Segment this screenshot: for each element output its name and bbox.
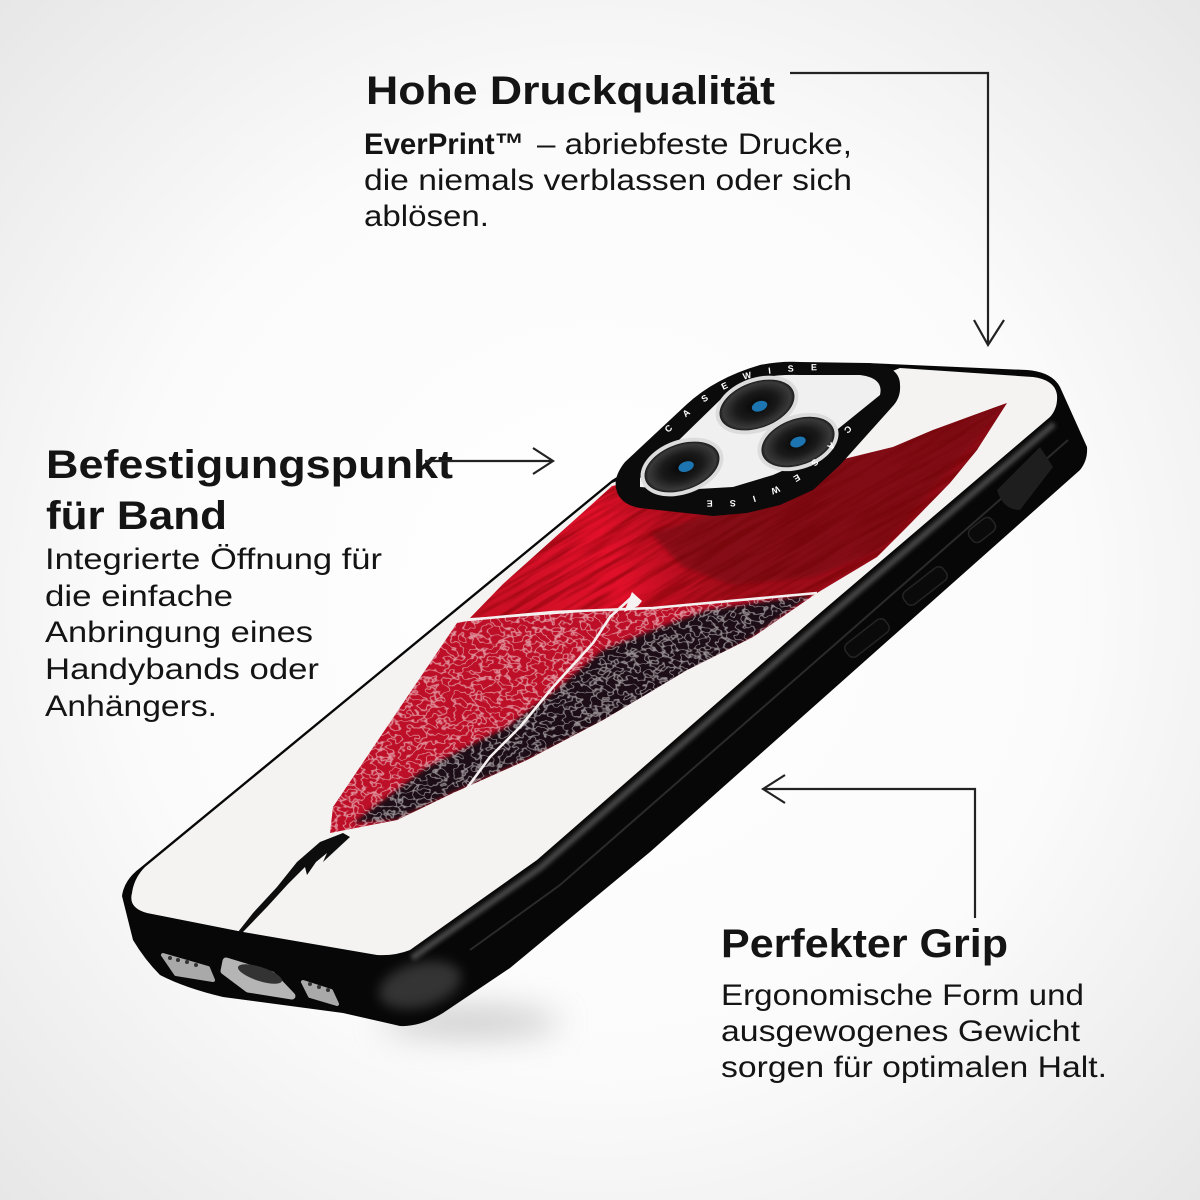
- text block: grip: sorgen für optimalen Halt.: [721, 1051, 1107, 1084]
- text block: strap attachment: Handybands oder: [45, 653, 319, 686]
- usb port: [224, 961, 292, 996]
- usb opening: [236, 960, 284, 988]
- side buttons: [842, 515, 998, 660]
- text block: print quality: EverPrint™: [364, 128, 524, 161]
- arrow: print quality: [790, 73, 1004, 345]
- case body: [122, 363, 1087, 1026]
- heading: strap attachment: [46, 443, 453, 538]
- heading: strap attachment: Befestigungspunkt: [46, 443, 453, 487]
- text block: strap attachment: die einfache: [45, 580, 233, 613]
- text block: print quality: die niemals verblassen oder sich: [364, 164, 852, 197]
- text block: strap attachment: Anhängers.: [45, 690, 217, 723]
- dark brush stroke: [650, 403, 1007, 585]
- camera glass: [640, 375, 881, 490]
- dark feather region: [353, 594, 813, 823]
- brand text on ring: CASEWISE: [665, 364, 817, 432]
- text block: strap attachment: [45, 543, 382, 723]
- text block: strap attachment: Anbringung eines: [45, 616, 313, 649]
- heading: print quality: Hohe Druckqualität: [366, 69, 775, 113]
- lower feather: [330, 594, 816, 833]
- strap slot: [997, 447, 1053, 510]
- text block: grip: ausgewogenes Gewicht: [721, 1015, 1081, 1048]
- lower bezel highlight: [412, 424, 1054, 958]
- lens right: [749, 402, 847, 482]
- white cracks: [467, 593, 817, 788]
- text block: print quality: [364, 128, 852, 233]
- heading: grip: Perfekter Grip: [721, 922, 1008, 966]
- droplet texture: [330, 594, 814, 832]
- speaker left: [163, 955, 213, 980]
- camera island: [616, 362, 900, 516]
- corner gloss: [374, 953, 466, 1017]
- heading: strap attachment: für Band: [46, 494, 227, 538]
- text block: print quality: ablösen.: [364, 200, 489, 233]
- speaker right: [303, 982, 337, 1004]
- crack star: [624, 592, 642, 612]
- ink stem: [238, 833, 350, 932]
- text block: grip: Ergonomische Form und: [721, 979, 1084, 1012]
- text block: print quality: – abriebfeste Drucke,: [537, 128, 852, 161]
- text block: strap attachment: Integrierte Öffnung für: [45, 543, 382, 576]
- lens top: [707, 365, 807, 445]
- arrow: strap attachment: [425, 448, 553, 474]
- phone case: [122, 362, 1088, 1052]
- brand text on ring lower: CASEWISE: [706, 426, 852, 507]
- lens left: [632, 427, 732, 507]
- arrow: grip: [763, 775, 975, 918]
- upper red paint: [470, 403, 1007, 618]
- drop shadow: [380, 1006, 560, 1038]
- lower bezel ridge: [470, 440, 1068, 950]
- white back face: [131, 368, 1057, 955]
- text block: grip: [721, 979, 1107, 1084]
